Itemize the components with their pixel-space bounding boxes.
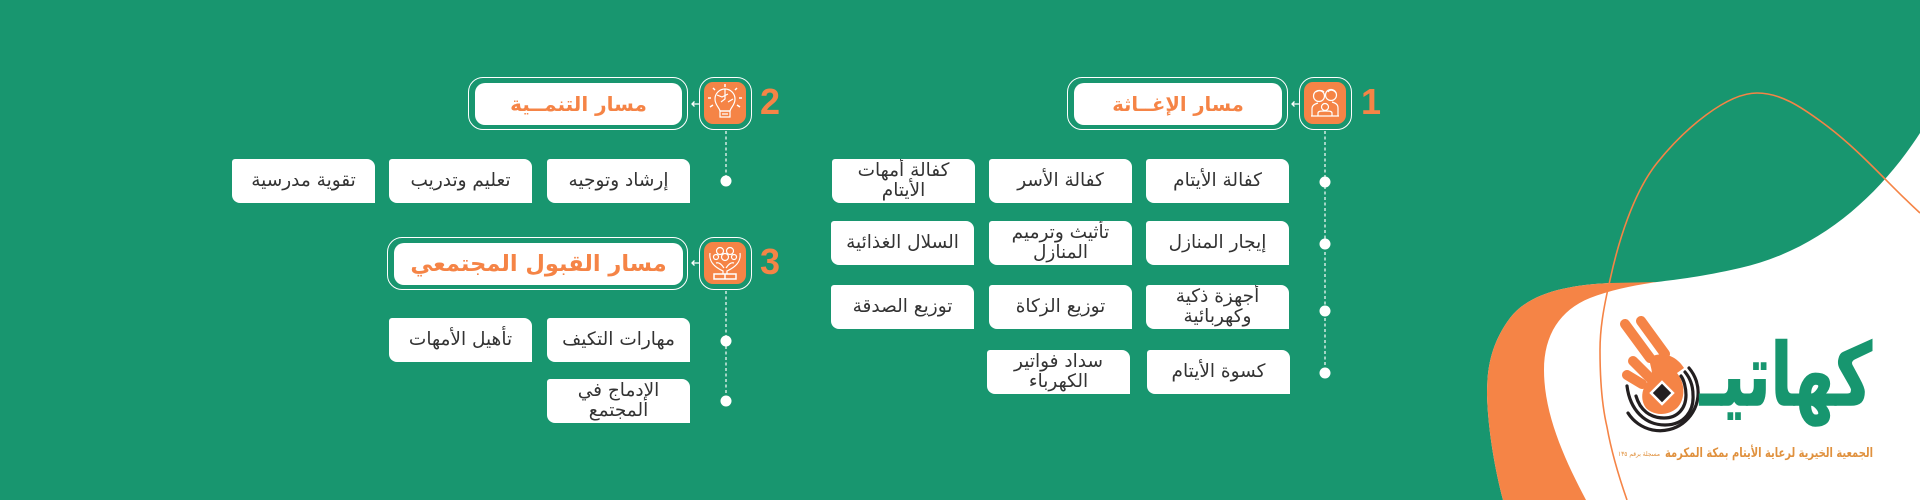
tagline (1618, 444, 1873, 461)
number 3: 3 (760, 241, 780, 282)
card: تأهيل الأمهات (409, 329, 512, 350)
card (547, 318, 690, 362)
heading: مسار التنمــية (510, 92, 647, 116)
card: الإدماج في (578, 380, 659, 401)
heading frame (468, 77, 688, 130)
card (1146, 221, 1289, 265)
card: كسوة الأيتام (1172, 361, 1265, 382)
card: تقوية مدرسية (251, 170, 356, 191)
card: كفالة أمهات (858, 160, 949, 181)
number 2: 2 (760, 81, 780, 122)
panel: community acceptance track (387, 237, 780, 423)
timeline: dashed line and dots (1320, 131, 1330, 378)
timeline: dashed line and dots (720, 291, 732, 406)
card: كفالة الأسر (1017, 170, 1104, 191)
panel: development track (232, 77, 780, 203)
heading frame (387, 237, 688, 290)
card (831, 221, 974, 265)
heading (1074, 83, 1282, 125)
card (989, 285, 1132, 329)
timeline: dashed line and dot (720, 131, 732, 186)
arrow (1291, 101, 1299, 107)
card (989, 221, 1132, 265)
card: الكهرباء (1029, 371, 1088, 392)
card (832, 159, 975, 203)
card (1147, 350, 1290, 394)
card: أجهزة ذكية (1176, 286, 1259, 307)
card: توزيع الزكاة (1016, 296, 1105, 317)
card (831, 285, 974, 329)
heading: مسار القبول المجتمعي (410, 251, 667, 277)
card: وكهربائية (1184, 306, 1251, 327)
card: تعليم وتدريب (410, 170, 511, 191)
icon: hand and circles emblem (1620, 316, 1700, 432)
card: كفالة الأيتام (1173, 170, 1262, 191)
arrow (691, 260, 699, 266)
card (547, 159, 690, 203)
tagline: مسجلة برقم ١٣٥ (1618, 450, 1660, 458)
card (547, 379, 690, 423)
arrow (691, 101, 699, 107)
panel: relief track (831, 77, 1381, 394)
card: إرشاد وتوجيه (569, 170, 668, 191)
card: توزيع الصدقة (853, 296, 952, 317)
card: تأثيث وترميم (1012, 222, 1109, 243)
heading (475, 83, 682, 125)
number 1: 1 (1361, 81, 1381, 122)
icon: family (1299, 77, 1352, 130)
card (389, 318, 532, 362)
icon: hands holding people (699, 237, 752, 290)
card (989, 159, 1132, 203)
heading (394, 243, 683, 285)
heading: مسار الإغــاثة (1112, 92, 1244, 116)
logo: hand emblem with wordmark and tagline (1618, 316, 1873, 461)
card: إيجار المنازل (1169, 232, 1266, 253)
card: المجتمع (589, 400, 648, 421)
card: المنازل (1033, 242, 1088, 263)
card (1146, 285, 1289, 329)
card (389, 159, 532, 203)
card (1146, 159, 1289, 203)
card: مهارات التكيف (562, 329, 675, 350)
card: السلال الغذائية (846, 232, 959, 253)
card (987, 350, 1130, 394)
heading frame (1067, 77, 1288, 130)
icon: light bulb (699, 77, 752, 130)
card (232, 159, 375, 203)
card: الأيتام (882, 180, 925, 201)
card: سداد فواتير (1014, 351, 1103, 372)
